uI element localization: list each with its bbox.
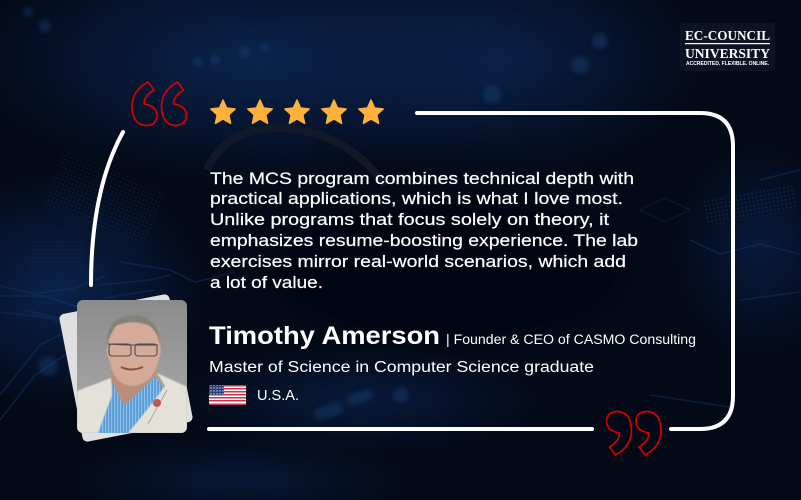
testimonial quote text: The MCS program combines technical depth with	[210, 170, 634, 188]
lapel pin	[153, 399, 161, 407]
testimonial quote text: emphasizes resume-boosting experience. The lab	[210, 232, 638, 250]
hair	[107, 315, 160, 345]
frame: white rounded border	[91, 113, 733, 429]
logo: EC-Council University	[680, 23, 775, 71]
icon: opening quote mark	[132, 82, 186, 126]
shirt	[98, 377, 164, 433]
photo card: back sheet	[59, 294, 193, 442]
testimonial quote text	[210, 170, 638, 292]
icon: closing quote mark	[606, 411, 661, 455]
testimonial quote text: exercises mirror real-world scenarios, which add	[210, 253, 626, 271]
name: Timothy Amerson	[209, 322, 440, 350]
role: | Founder & CEO of CASMO Consulting	[446, 332, 696, 347]
glasses	[108, 344, 158, 356]
neck	[110, 370, 160, 408]
face	[107, 316, 161, 386]
jacket	[77, 378, 112, 433]
testimonial quote text: a lot of value.	[210, 274, 323, 292]
testimonial quote text: practical applications, which is what I love most.	[210, 190, 623, 208]
logo: EC-Council University: EC-COUNCIL	[685, 29, 770, 44]
icon: USA flag	[209, 385, 246, 405]
logo: EC-Council University: ACCREDITED. FLEXIBLE. ONLINE.	[686, 61, 769, 67]
padlock shackle	[207, 128, 385, 185]
mouth	[121, 367, 143, 370]
portrait photo	[77, 300, 187, 433]
degree: Master of Science in Computer Science graduate	[209, 359, 594, 376]
rating: five stars	[211, 100, 383, 123]
testimonial quote text: Unlike programs that focus solely on theory, it	[210, 211, 609, 229]
logo: EC-Council University: UNIVERSITY	[685, 47, 770, 62]
country: U.S.A.	[257, 388, 299, 404]
